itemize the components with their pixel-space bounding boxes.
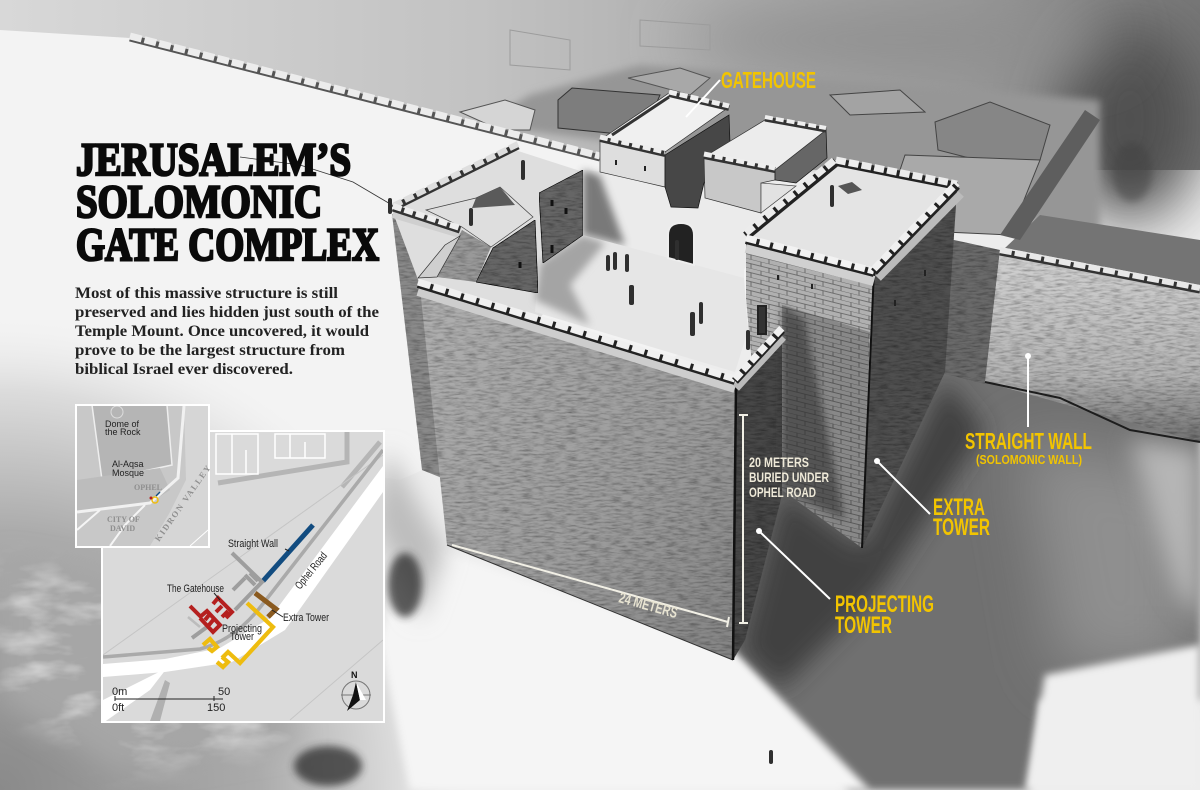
gate complex building [392, 92, 961, 660]
west block walls [392, 214, 462, 478]
label: gatehouse: GATEHOUSE [721, 67, 816, 93]
main locator map: The Gatehouse [167, 583, 224, 595]
inset overview map: the Rock [105, 427, 141, 437]
grey wall remains [192, 553, 262, 638]
front parapet battlements [418, 291, 735, 388]
title: GATE COMPLEX [76, 219, 379, 271]
dimension: 20 meters: BURIED UNDER [749, 469, 829, 485]
main locator map: Projecting [222, 623, 262, 635]
intro text: Temple Mount. Once uncovered, it would [75, 323, 369, 340]
main locator map: Ophel Road [293, 550, 330, 592]
gatehouse on map [190, 598, 232, 632]
scale bar: 0ft [112, 702, 124, 714]
inset overview map: CITY OF [107, 515, 140, 524]
intro text: prove to be the largest structure from [75, 342, 345, 359]
inset overview map: Al-Aqsa [112, 459, 144, 469]
north compass: N [351, 670, 358, 680]
inset overview map: Mosque [112, 468, 144, 478]
label: extra tower: TOWER [933, 514, 990, 541]
courtyard floor [535, 235, 748, 372]
inset overview map: OPHEL [134, 483, 162, 492]
back wall of the courtyard [583, 170, 762, 280]
figures on the complex [388, 160, 834, 764]
title [76, 134, 379, 271]
label: straight wall: STRAIGHT WALL [965, 428, 1092, 454]
main locator map: Straight Wall [228, 538, 278, 550]
label: gatehouse [686, 67, 816, 117]
inset overview map [75, 404, 213, 548]
straight wall [938, 238, 1200, 442]
gatehouse [600, 140, 665, 187]
long city wall with battlements [130, 36, 600, 205]
title: SOLOMONIC [76, 176, 322, 228]
scale bar: 0m [112, 686, 127, 698]
label: straight wall: (SOLOMONIC WALL) [976, 452, 1082, 467]
extra tower on map [255, 593, 276, 617]
label: straight wall [965, 353, 1092, 467]
straight wall on map [263, 525, 313, 581]
inner block [539, 170, 583, 263]
scale bar [112, 686, 230, 714]
intro text: Most of this massive structure is still [75, 285, 339, 302]
town behind the gate complex [460, 20, 1200, 285]
main front wall [420, 288, 735, 660]
bushes and trees [294, 553, 422, 786]
label: extra tower: EXTRA [933, 494, 985, 521]
main locator map [101, 430, 385, 723]
gate arch [668, 223, 694, 265]
projecting tower on map [203, 603, 273, 667]
dimension: 20 meters: 20 METERS [749, 454, 809, 470]
dimension: 20 meters [739, 415, 829, 623]
label: projecting tower [756, 528, 934, 639]
intro text: biblical Israel ever discovered. [75, 361, 293, 378]
intro text: preserved and lies hidden just south of the [75, 304, 379, 321]
intro text [75, 285, 379, 378]
inset overview map: KIDRON VALLEY [152, 462, 213, 543]
extra tower faces [746, 238, 874, 365]
label: projecting tower: PROJECTING [835, 591, 934, 618]
scale bar: 50 [218, 686, 230, 698]
inset overview map: Dome of [105, 419, 140, 429]
inset overview map: DAVID [110, 524, 135, 533]
scale bar: 150 [207, 702, 225, 714]
dimension: 24 meters: 24 METERS [617, 589, 679, 622]
title: JERUSALEM’S [76, 134, 351, 186]
label: extra tower [874, 458, 990, 541]
label: projecting tower: TOWER [835, 612, 892, 639]
north compass [341, 670, 371, 711]
main locator map: Tower [230, 631, 254, 643]
main locator map: Extra Tower [283, 612, 329, 624]
narrow projecting face [733, 335, 782, 660]
dimension: 20 meters: OPHEL ROAD [749, 484, 816, 500]
second tower [704, 157, 775, 213]
dimension: 24 meters [452, 545, 729, 627]
